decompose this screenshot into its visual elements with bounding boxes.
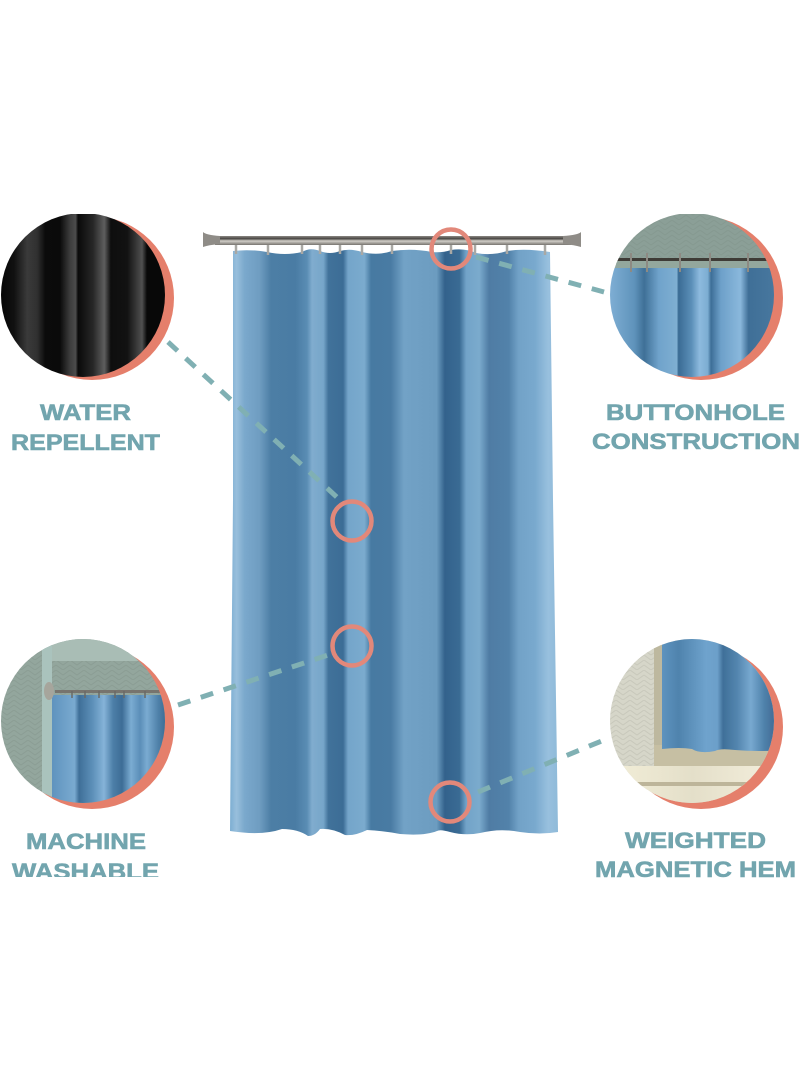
curtain fabric	[230, 249, 558, 836]
dashed connector: buttonhole construction	[476, 257, 604, 292]
label: WATER	[40, 400, 131, 425]
infographic: shower curtain features	[1, 214, 799, 878]
ring marker: buttonhole	[432, 230, 470, 268]
ring marker: hem	[430, 782, 470, 822]
shower curtain	[203, 232, 581, 836]
ring marker: water repellent	[332, 502, 372, 540]
feature: water repellent	[0, 214, 174, 455]
dashed connector: weighted magnetic hem	[478, 740, 604, 792]
feature: weighted magnetic hem	[595, 638, 796, 882]
rod close-up photo	[605, 214, 780, 378]
label: WEIGHTED	[625, 828, 766, 853]
black fabric swatch	[0, 214, 170, 379]
accent crescent	[10, 216, 174, 380]
dashed connector: machine washable	[178, 655, 328, 705]
label: MACHINE	[26, 829, 146, 854]
accent crescent	[619, 645, 783, 809]
feature: buttonhole construction: CONSTRUCTION	[592, 429, 800, 454]
label: BUTTONHOLE	[606, 400, 785, 425]
accent crescent	[10, 645, 174, 809]
bathroom photo	[0, 638, 170, 806]
shower rod	[203, 232, 581, 247]
feature: machine washable: WASHABLE	[12, 859, 159, 884]
accent crescent	[619, 216, 783, 380]
feature: buttonhole construction	[592, 214, 800, 454]
curtain rings	[236, 236, 545, 255]
dashed connector: water repellent	[168, 342, 340, 500]
ring marker: machine washable	[332, 626, 372, 666]
feature: water repellent: REPELLENT	[11, 430, 161, 455]
hem close-up photo	[605, 638, 780, 806]
feature: machine washable	[0, 638, 174, 884]
feature: weighted magnetic hem: MAGNETIC HEM	[595, 857, 796, 882]
